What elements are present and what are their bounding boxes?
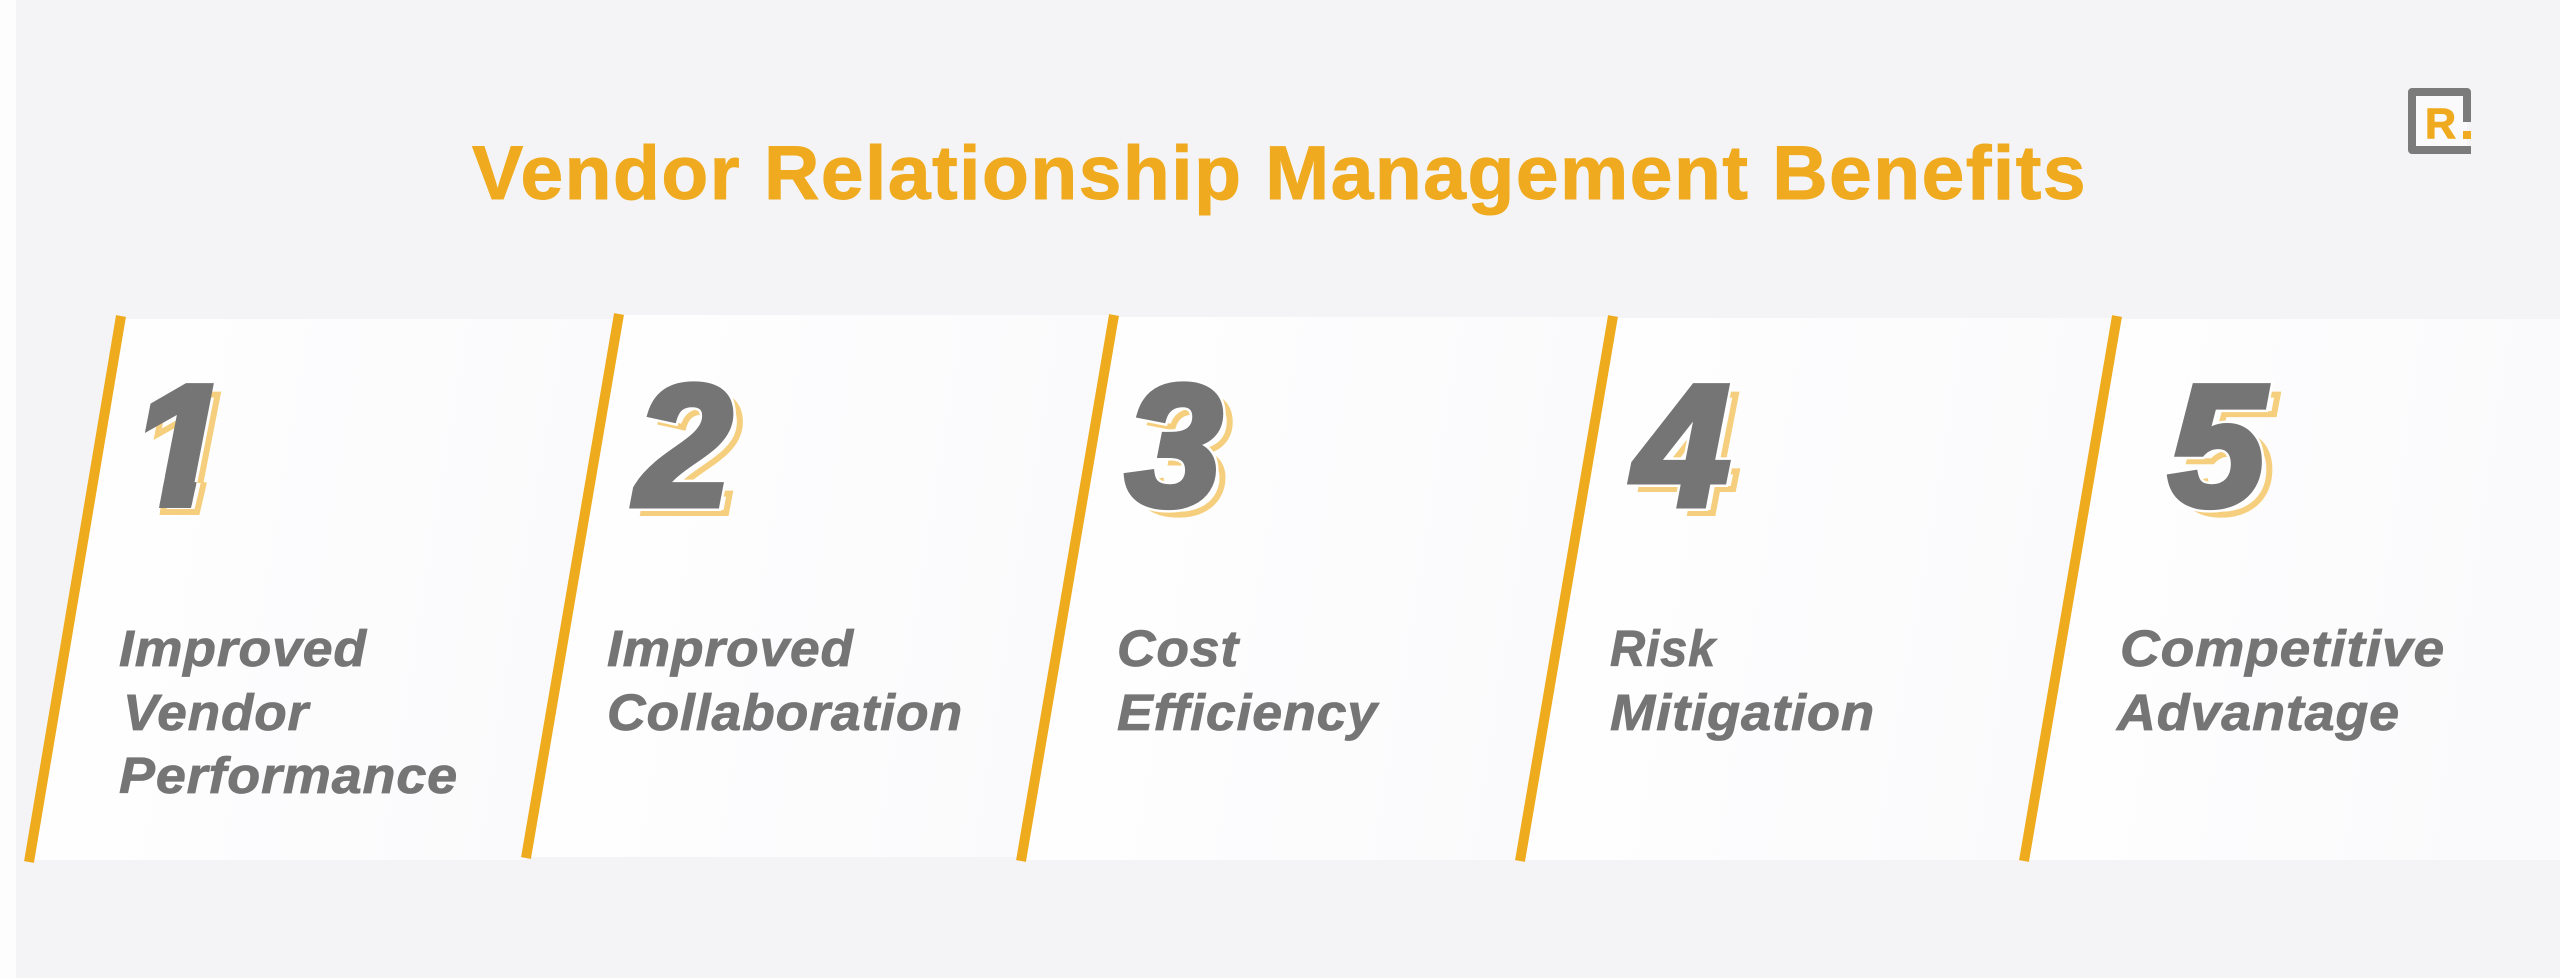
number 2: 2 [633,350,732,542]
label: Cost Efficiency: Cost [1117,620,1240,677]
label: Improved Vendor Performance [119,620,458,804]
number 5: 5 [2169,350,2267,542]
divider bar 3 [1021,315,1114,861]
number 2: 2 [633,350,732,542]
label: Improved Vendor Performance: Improved [119,620,368,677]
label: Improved Collaboration [607,620,963,741]
label: Competitive Advantage: Advantage [2115,684,2400,741]
panel: cost efficiency [1021,315,1613,861]
number 2: 2 [643,358,742,550]
number 3: 3 [1126,350,1222,542]
number 3: 3 [1136,358,1232,550]
number 4: 4 [1641,358,1740,550]
number 4: 4 [1631,350,1730,542]
number 1 [144,383,222,515]
divider bar 4 [1520,316,1613,861]
title: Vendor Relationship Management Benefits [472,131,2087,216]
label: Improved Vendor Performance: Vendor [123,684,311,741]
panel: competitive advantage [2024,316,2560,861]
number 5: 5 [2169,350,2267,542]
panel: risk mitigation [1520,316,2118,861]
label: Improved Collaboration: Improved [607,620,855,677]
number 1: 1 [139,358,235,550]
label: Competitive Advantage: Competitive [2120,620,2445,677]
icon: logo: R [2425,100,2456,148]
label: Improved Vendor Performance: Performance [119,747,458,804]
label: Improved Collaboration: Collaboration [607,684,963,741]
number 4: 4 [1631,350,1730,542]
label: Cost Efficiency: Efficiency [1117,684,1380,741]
divider bar 2 [526,314,619,858]
label: Cost Efficiency [1117,620,1380,741]
number 5: 5 [2180,358,2278,550]
label: Risk Mitigation: Mitigation [1610,684,1875,741]
label: Risk Mitigation: Risk [1610,620,1718,677]
number 1: 1 [131,350,227,542]
number 3: 3 [1126,350,1222,542]
panel: improved collaboration [526,314,1114,858]
label: Competitive Advantage [2115,620,2445,741]
icon: logo [2412,92,2471,150]
label: Risk Mitigation [1610,620,1875,741]
panel: improved vendor performance [24,315,456,863]
divider bar 1 [29,316,121,862]
divider bar 5 [2024,316,2117,861]
